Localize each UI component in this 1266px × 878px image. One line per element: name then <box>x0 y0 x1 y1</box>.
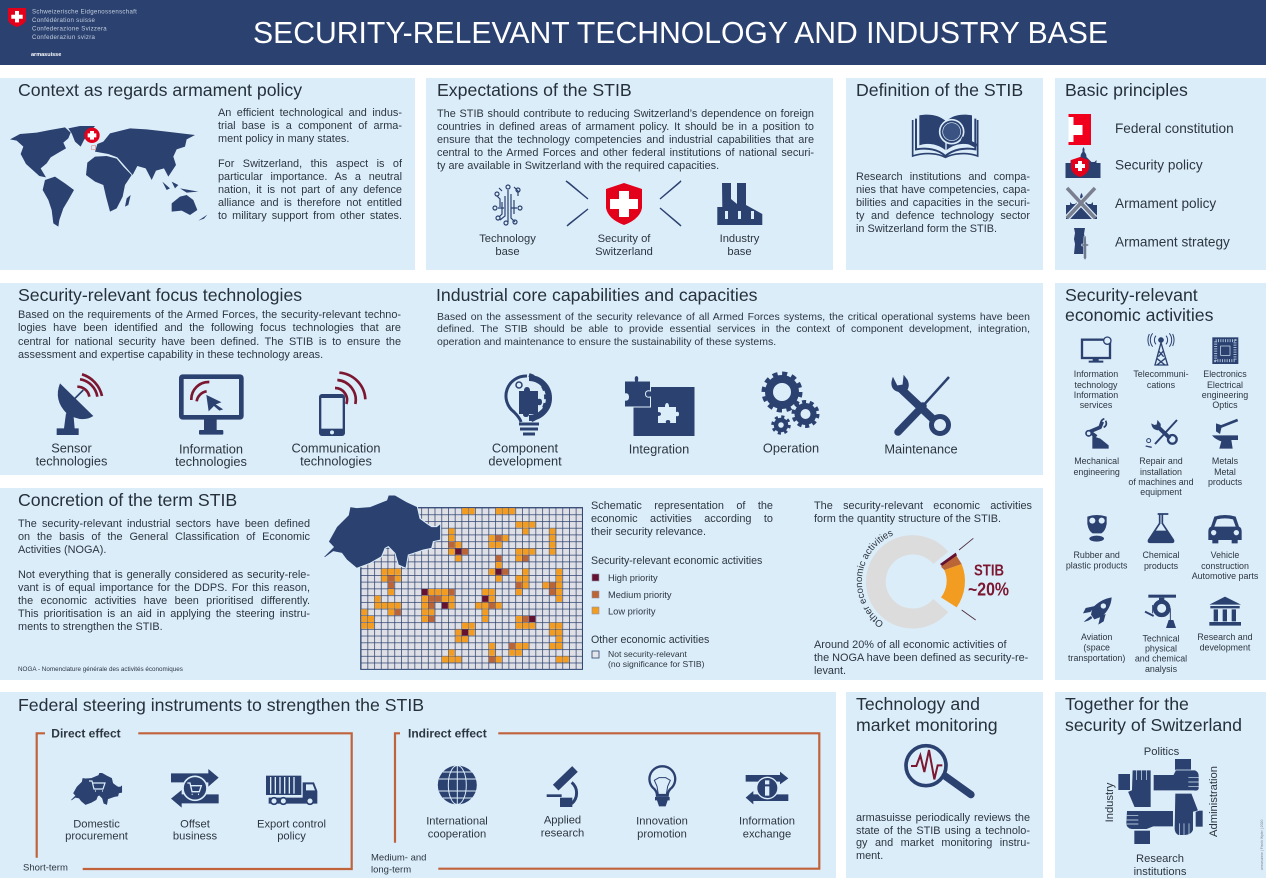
icon: Swiss shield <box>606 183 642 225</box>
label: federal constitution: Federal constitution <box>1115 121 1234 136</box>
heading: focus technologies: Security-relevant focus technologies <box>18 285 302 305</box>
label: applied research: Applied <box>544 814 581 826</box>
label: repair: installation <box>1140 467 1182 477</box>
icon: operation gears <box>764 374 818 433</box>
panel: expectations of the STIB <box>426 78 833 270</box>
text: ment. <box>856 850 883 862</box>
text: focus technologies <box>18 309 401 361</box>
panel: focus technologies and industrial capabilities <box>0 283 1043 475</box>
label: research institutions: Research <box>1136 853 1184 865</box>
label: telecommunications <box>1133 369 1189 390</box>
label: research institutions <box>1134 853 1187 878</box>
text: schematic representation <box>591 500 773 538</box>
text: focus technologies: assessment and expertise capability in these technology areas. <box>18 349 323 361</box>
label: applied research: research <box>541 828 584 840</box>
icon: joined hands <box>1118 759 1203 844</box>
label: mechanical engineering: Mechanical <box>1074 456 1119 466</box>
label: chemical products: products <box>1144 561 1179 571</box>
legend: High priority <box>608 573 658 583</box>
text: state of the STIB using a technolo- <box>856 825 1030 837</box>
label: electronics <box>1202 369 1248 410</box>
icon: book with magnifier <box>913 115 978 157</box>
label: innovation promotion: Innovation <box>636 816 688 828</box>
label: electronics: engineering <box>1202 390 1248 400</box>
icon: maintenance tools <box>892 376 949 434</box>
label: sensor technologies: Sensor <box>51 440 93 456</box>
text: paragraph 2 <box>218 158 402 222</box>
label: information technology: Information <box>1074 390 1118 400</box>
icon: metals <box>1212 420 1238 449</box>
label: international cooperation: cooperation <box>428 828 486 840</box>
label: sensor technologies: technologies <box>36 454 107 468</box>
text: prioritisation <box>18 569 310 633</box>
icon: applied research microscope <box>547 769 577 807</box>
text: quantity structure <box>814 500 1032 525</box>
label: applied research <box>541 814 584 840</box>
label: mechanical engineering <box>1073 456 1120 477</box>
icon: technical analysis <box>1145 595 1176 628</box>
heading: Expectations of the STIB <box>437 80 632 100</box>
panel: context as regards armament policy <box>0 78 415 270</box>
label: offset business: business <box>173 830 217 842</box>
logo: Swiss shield <box>8 8 26 27</box>
text: NOGA definition <box>18 518 310 556</box>
label: technology base: base <box>495 246 520 258</box>
legend: Medium priority <box>608 590 672 600</box>
icon: domestic procurement <box>71 773 122 805</box>
label: domestic procurement <box>65 818 129 842</box>
heading: Federal steering instruments to strengthen the STIB <box>18 695 424 715</box>
text: NOGA definition: on the basis of the General Classification of Economic <box>18 530 310 542</box>
label: research and development: development <box>1200 642 1251 652</box>
icon: chemical products <box>1148 514 1174 542</box>
label: repair <box>1128 456 1194 497</box>
chart: donut: Other economic activities <box>856 531 893 627</box>
label: communication technologies: technologies <box>300 454 372 468</box>
chart: activity grid <box>361 508 582 669</box>
label: international cooperation <box>426 816 488 840</box>
label: electronics: Electrical <box>1207 380 1243 390</box>
heading: industrial capabilities: Industrial core capabilities and capacities <box>436 285 758 305</box>
text: industrial capabilities: Based on the assessment of the security relevance of all Armed Forces systems, the critical operational systems have been <box>437 310 1030 322</box>
icon: information monitor <box>181 377 241 435</box>
label: vehicle construction <box>1192 550 1259 581</box>
text: focus technologies: central for national security have been defined. The STIB is to ensure the <box>18 336 401 348</box>
credit: armasuisse | Fisnik Wyler | 2020 <box>1260 820 1264 870</box>
icon: aviation <box>1083 597 1112 625</box>
icon: information technology <box>1082 337 1111 363</box>
icon: international cooperation globe <box>438 766 477 804</box>
bracket: indirect effect <box>395 733 819 869</box>
label: communication technologies: Communication <box>292 440 380 456</box>
legend: Not security-relevant <box>608 649 687 659</box>
icon: communication phone <box>319 373 365 436</box>
icon: repair <box>1146 420 1177 447</box>
label: medium- and long-term: long-term <box>371 864 411 876</box>
icon: constitution flag <box>1068 114 1091 145</box>
label: security policy: Security policy <box>1115 158 1203 172</box>
icon: integration puzzle <box>624 376 694 436</box>
label: telecommunications: cations <box>1147 380 1176 390</box>
text: Research institutions and compa- <box>856 171 1030 183</box>
text: schematic representation: economic activities according to <box>591 513 773 525</box>
text: focus technologies: logies have been identified and the following focus technologies that are <box>18 322 401 334</box>
label: research institutions: institutions <box>1134 866 1187 878</box>
heading: Context as regards armament policy <box>18 80 302 100</box>
label: information technology <box>1074 369 1118 410</box>
text: quantity structure: form the quantity structure of the STIB. <box>814 513 1001 525</box>
icon: research and development <box>1209 597 1241 626</box>
text: paragraph 1: An efficient technological and indus- <box>218 107 402 119</box>
label: research and development: Research and <box>1197 632 1253 642</box>
text: schematic representation: their security relevance. <box>591 526 706 538</box>
callout: STIB about 20 percent: ~20% <box>968 578 1009 600</box>
label: research and development <box>1197 632 1253 652</box>
label: component development: development <box>488 454 562 468</box>
heading <box>856 694 998 734</box>
label: industry base <box>720 233 760 258</box>
panel: federal steering instruments <box>0 692 836 878</box>
heading: Concretion of the term STIB <box>18 490 237 510</box>
label: indirect effect: Indirect effect <box>408 726 487 740</box>
title: SECURITY-RELEVANT TECHNOLOGY AND INDUSTRY BASE <box>253 15 1108 50</box>
label: export control policy: policy <box>277 830 306 842</box>
label: technology base <box>479 233 536 258</box>
label: export control policy <box>257 818 326 842</box>
legend: (no significance for STIB) <box>608 659 705 669</box>
label: domestic procurement: procurement <box>65 830 129 842</box>
chart label: other economic activities <box>862 533 900 623</box>
label: integration: Integration <box>629 442 689 456</box>
icon: technology base <box>493 185 522 225</box>
icon: export truck <box>266 776 317 804</box>
label: aviation: Aviation <box>1081 632 1112 642</box>
text: ty and defence technology sector <box>856 210 1030 222</box>
icon: component development bulb <box>506 375 549 434</box>
world map <box>10 126 208 227</box>
text: paragraph 2: to military support from other states. <box>218 210 402 222</box>
header banner <box>0 0 1266 65</box>
icon: armament strategy <box>1074 228 1088 260</box>
logo: confederation names: Schweizerische Eidgenossenschaft <box>32 8 137 16</box>
legend: Low priority <box>608 606 656 616</box>
label: vehicle construction: Vehicle <box>1211 550 1239 560</box>
icon: vehicle <box>1208 515 1242 543</box>
heading: market monitoring <box>856 714 998 734</box>
label: information technology: Information <box>1074 369 1118 379</box>
text: around 20 percent: Around 20% of all economic activities of <box>814 639 1007 651</box>
legend: Other economic activities <box>591 634 709 646</box>
icon: armament policy <box>1066 188 1097 219</box>
label: international cooperation: International <box>426 816 488 828</box>
logo: confederation names: Confederazione Svizzera <box>32 26 107 32</box>
panel: basic principles <box>1055 78 1266 270</box>
label: rubber products <box>1066 550 1128 570</box>
label: sensor technologies <box>36 440 107 468</box>
label: electronics: Electronics <box>1203 369 1247 379</box>
heading: Technology and <box>856 694 980 714</box>
label: industry base: base <box>727 246 752 258</box>
label: vehicle construction: construction <box>1201 561 1249 571</box>
text: countries in defined areas of armament policy. It should be in a position to <box>437 121 814 133</box>
label: information technology: services <box>1080 400 1113 410</box>
text: NOGA definition: Activities (NOGA). <box>18 544 106 556</box>
label: chemical products: Chemical <box>1142 550 1180 560</box>
label: technical analysis <box>1135 633 1187 674</box>
label: electronics: Optics <box>1212 400 1238 410</box>
panel: together for the security of Switzerland <box>1055 692 1266 878</box>
label: communication technologies <box>292 440 380 468</box>
text: nies that have competencies, capa- <box>856 184 1030 196</box>
icon: mechanical engineering <box>1086 419 1109 449</box>
logo: confederation names <box>32 8 137 41</box>
label: aviation: transportation) <box>1068 653 1125 663</box>
icon: offset business <box>171 769 219 808</box>
label: mechanical engineering: engineering <box>1073 467 1120 477</box>
label: administration: Administration <box>1208 766 1220 837</box>
text: around 20 percent: the NOGA have been defined as security-re- <box>814 652 1028 664</box>
label: component development <box>488 440 562 468</box>
panel: security-relevant economic activities <box>1055 283 1266 680</box>
text: central to the Armed Forces and other federal institutions of national securi- <box>437 147 814 159</box>
label: rubber products: Rubber and <box>1073 550 1120 560</box>
logo: confederation names: Confederaziun svizra <box>32 34 96 41</box>
text: paragraph 1: trial base is a component of arma- <box>218 120 402 132</box>
label: offset business: Offset <box>180 818 211 830</box>
text: bilities and capacities in the securi- <box>856 197 1030 209</box>
label: domestic procurement: Domestic <box>73 818 120 830</box>
label: information technologies <box>175 442 247 469</box>
text: prioritisation: This prioritisation is an aid in applying the steering instru- <box>18 608 310 620</box>
text: paragraph 2: alliance and is therefore not entitled <box>218 197 402 209</box>
label: industry base: Industry <box>720 233 760 245</box>
icon: factory <box>717 183 762 225</box>
text: NOGA definition: The security-relevant industrial sectors have been defined <box>18 518 310 530</box>
label: direct effect: Direct effect <box>51 726 121 740</box>
label: technical analysis: physical <box>1145 643 1177 653</box>
text: paragraph 2: particular importance. As a neutral <box>218 171 402 183</box>
panel: concretion of the term STIB <box>0 488 1043 680</box>
icon: security policy <box>1066 147 1100 178</box>
heading <box>1065 285 1213 325</box>
text: quantity structure: The security-relevant economic activities <box>814 500 1032 512</box>
label: medium- and long-term <box>371 852 426 876</box>
text: prioritisation: ments to strengthen the STIB. <box>18 621 163 633</box>
text: The STIB should contribute to reducing Switzerland’s dependence on foreign <box>437 108 814 120</box>
label: information technologies: Information <box>179 442 243 456</box>
icon: electronics <box>1212 337 1238 364</box>
panel: technology and market monitoring <box>846 692 1043 878</box>
text: focus technologies: Based on the requirements of the Armed Forces, the security-relevant techno- <box>18 309 401 321</box>
label: politics: Politics <box>1144 746 1180 758</box>
label: armament strategy: Armament strategy <box>1115 234 1230 250</box>
icon: information exchange <box>746 772 788 804</box>
heading: security of Switzerland <box>1065 714 1242 734</box>
text: paragraph 2: For Switzerland, this aspect is of <box>218 158 402 170</box>
label: medium- and long-term: Medium- and <box>371 852 426 864</box>
label: repair: equipment <box>1140 487 1182 497</box>
bracket: direct effect <box>37 733 352 869</box>
label: metals: products <box>1208 477 1243 487</box>
label: information exchange: exchange <box>743 828 791 840</box>
legend: heading security-relevant: Security-relevant economic activities <box>591 555 762 567</box>
callout: STIB about 20 percent <box>968 562 1009 600</box>
label: repair: of machines and <box>1128 477 1194 487</box>
label: information exchange: Information <box>739 816 795 828</box>
text: paragraph 1 <box>218 107 402 145</box>
label: security of Switzerland: Switzerland <box>595 246 653 258</box>
heading: Definition of the STIB <box>856 80 1023 100</box>
heading: Security-relevant <box>1065 285 1198 305</box>
label: information technology: technology <box>1075 380 1118 390</box>
text: ty are available in Switzerland with the required capacities. <box>437 160 719 172</box>
text: in Switzerland form the STIB. <box>856 223 997 235</box>
label: short-term: Short-term <box>23 862 68 874</box>
arrows: spikes around shield <box>566 181 681 226</box>
chart: donut <box>856 531 976 628</box>
label: aviation <box>1068 632 1125 663</box>
icon: innovation bulb <box>649 766 675 806</box>
label: component development: Component <box>492 440 559 456</box>
label: rubber products: plastic products <box>1066 560 1128 570</box>
legend <box>591 555 762 669</box>
label: telecommunications: Telecommuni- <box>1133 369 1189 379</box>
callout: STIB about 20 percent: STIB <box>974 562 1004 580</box>
text <box>856 812 1030 862</box>
label: armament policy: Armament policy <box>1115 196 1216 211</box>
label: innovation promotion: promotion <box>637 828 687 840</box>
text: around 20 percent <box>814 639 1028 677</box>
map: Switzerland <box>323 495 441 568</box>
text: industrial capabilities: defined. The STIB should be able to provide essential services in the context of component development, integration, <box>437 323 1030 335</box>
heading: Basic principles <box>1065 80 1188 100</box>
text: armasuisse periodically reviews the <box>856 812 1030 824</box>
text: prioritisation: the economic activities have been prioritised differently. <box>18 595 310 607</box>
label: technical analysis: analysis <box>1145 664 1178 674</box>
heading <box>1065 694 1242 734</box>
icon: sensor dish <box>57 374 102 435</box>
icon: telecommunications <box>1148 333 1174 365</box>
logo: armasuisse: armasuisse <box>31 52 61 58</box>
text: prioritisation: Not everything that is generally considered as security-rele- <box>18 569 310 581</box>
text <box>437 108 814 172</box>
footnote: NOGA - Nomenclature générale des activités économiques <box>18 666 183 673</box>
text: paragraph 1: ment policy in many states. <box>218 133 349 145</box>
logo: confederation names: Confédération suisse <box>32 17 96 24</box>
text: ensure that the technology competencies and industrial capabilities that are <box>437 134 814 146</box>
icon: magnifier <box>906 746 971 795</box>
label: chemical products <box>1142 550 1180 571</box>
text: around 20 percent: levant. <box>814 665 846 677</box>
label: metals: Metals <box>1212 456 1239 466</box>
label: information exchange <box>739 816 795 840</box>
label: security of Switzerland: Security of <box>598 233 651 245</box>
label: technical analysis: and chemical <box>1135 653 1187 663</box>
label: aviation: (space <box>1083 642 1110 652</box>
text <box>856 171 1030 235</box>
label: repair: Repair and <box>1139 456 1183 466</box>
label: metals <box>1208 456 1243 487</box>
label: information technologies: technologies <box>175 454 247 469</box>
text: prioritisation: vant is of equal importance for the DDPS. For this reason, <box>18 582 310 594</box>
text: schematic representation: Schematic representation of the <box>591 500 773 512</box>
text: gy and market monitoring instru- <box>856 837 1030 849</box>
heading: Together for the <box>1065 694 1189 714</box>
icon: rubber products <box>1087 515 1107 542</box>
label: metals: Metal <box>1214 467 1236 477</box>
label: innovation promotion <box>636 816 688 840</box>
panel: definition of the STIB <box>846 78 1043 270</box>
text: paragraph 2: nation, it is not part of any defence <box>218 184 402 196</box>
label: technology base: Technology <box>479 233 536 245</box>
heading: economic activities <box>1065 305 1213 325</box>
label: vehicle construction: Automotive parts <box>1192 571 1259 581</box>
label: export control policy: Export control <box>257 818 326 830</box>
label: industry: Industry <box>1104 782 1116 822</box>
text: industrial capabilities <box>437 310 1030 348</box>
label: operation: Operation <box>763 440 819 456</box>
label: offset business <box>173 818 217 842</box>
label: security of Switzerland <box>595 233 653 258</box>
label: maintenance: Maintenance <box>884 442 958 456</box>
label: technical analysis: Technical <box>1142 633 1180 643</box>
text: industrial capabilities: operation and maintenance to ensure the sustainability of these systems. <box>437 336 776 348</box>
